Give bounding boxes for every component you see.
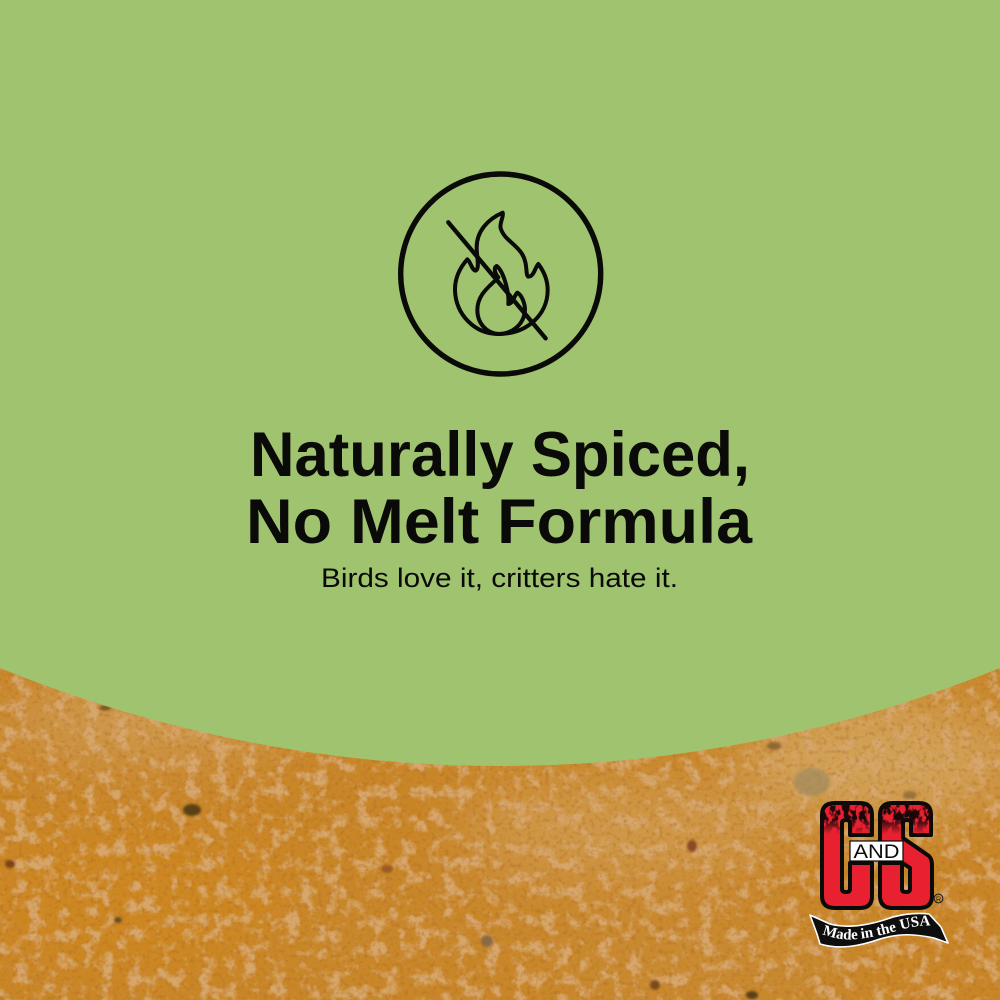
dark seed specks [5, 706, 917, 999]
heading line 1: Naturally Spiced, [250, 420, 750, 490]
logo registered mark [934, 894, 943, 904]
panel: crumbly suet texture background [0, 650, 1000, 1000]
logo AND plate: AND [854, 842, 900, 863]
heading line 2: No Melt Formula [246, 487, 753, 557]
panel: green curved header [0, 0, 1000, 766]
heading [246, 420, 753, 557]
icon: inner flame [477, 266, 525, 334]
logo: C and S Made in the USA [809, 801, 949, 948]
logo banner: Made in the USA [822, 916, 930, 940]
icon: outer flame [455, 213, 548, 334]
logo letter C [822, 803, 872, 908]
logo letter S [880, 803, 932, 908]
logo registered mark: R [936, 896, 941, 904]
subheading: Birds love it, critters hate it. [321, 563, 678, 593]
icon ring [401, 174, 601, 374]
logo flame char on letters [822, 803, 931, 834]
logo banner [809, 912, 949, 948]
icon: slash [448, 222, 546, 338]
icon: no-flame in circle [401, 174, 601, 374]
